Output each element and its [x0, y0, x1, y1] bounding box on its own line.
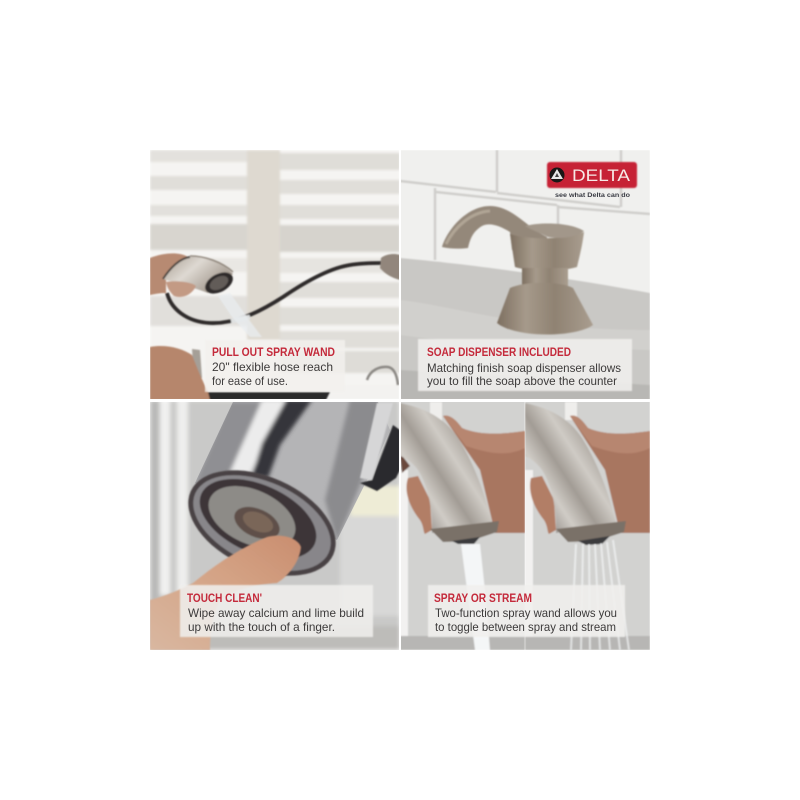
shutter background photo	[150, 150, 400, 400]
body text line 1: Wipe away calcium and lime build	[188, 606, 364, 620]
body text line 2: to toggle between spray and stream	[435, 620, 616, 634]
tile wall and counter	[400, 150, 650, 400]
spout	[525, 403, 616, 533]
hand	[443, 416, 525, 533]
faucet neck	[380, 254, 400, 280]
panel: touch clean	[150, 400, 400, 650]
stream photo	[400, 400, 525, 650]
body text line 1: Matching finish soap dispenser allows	[427, 361, 621, 375]
caption card	[418, 339, 632, 391]
body text line 2: up with the touch of a finger.	[188, 620, 335, 634]
tagline: see what Delta can do	[555, 192, 630, 199]
panel: soap dispenser	[400, 150, 650, 400]
second hand and sink	[150, 346, 398, 400]
spout	[400, 403, 492, 533]
spray photo	[525, 400, 650, 650]
Delta logo	[547, 162, 637, 199]
hand holding spray wand	[150, 253, 382, 323]
caption card	[205, 340, 345, 392]
panel: pull out spray wand	[150, 150, 400, 400]
nozzle face	[187, 469, 337, 577]
body text line 1: Two-function spray wand allows you	[435, 606, 617, 620]
hand	[570, 416, 650, 533]
panel: spray or stream	[400, 400, 650, 650]
heading: TOUCH CLEAN'	[187, 593, 262, 605]
caption card	[180, 585, 373, 637]
body text line 2: you to fill the soap above the counter	[427, 374, 617, 388]
soap dispenser	[442, 206, 593, 335]
hose	[167, 263, 382, 323]
caption card	[428, 585, 625, 637]
blurred background	[150, 400, 400, 650]
body text line 1: 20" flexible hose reach	[212, 360, 333, 374]
side button	[360, 403, 400, 491]
heading: SOAP DISPENSER INCLUDED	[427, 347, 571, 359]
spray water	[571, 540, 629, 650]
heading: SPRAY OR STREAM	[434, 593, 532, 605]
DELTA wordmark: DELTA	[572, 166, 631, 185]
heading: PULL OUT SPRAY WAND	[212, 347, 335, 359]
water stream	[220, 296, 262, 338]
body text line 2: for ease of use.	[212, 374, 288, 388]
spray head body	[187, 402, 399, 577]
logo mark	[550, 168, 564, 182]
finger	[150, 536, 301, 650]
